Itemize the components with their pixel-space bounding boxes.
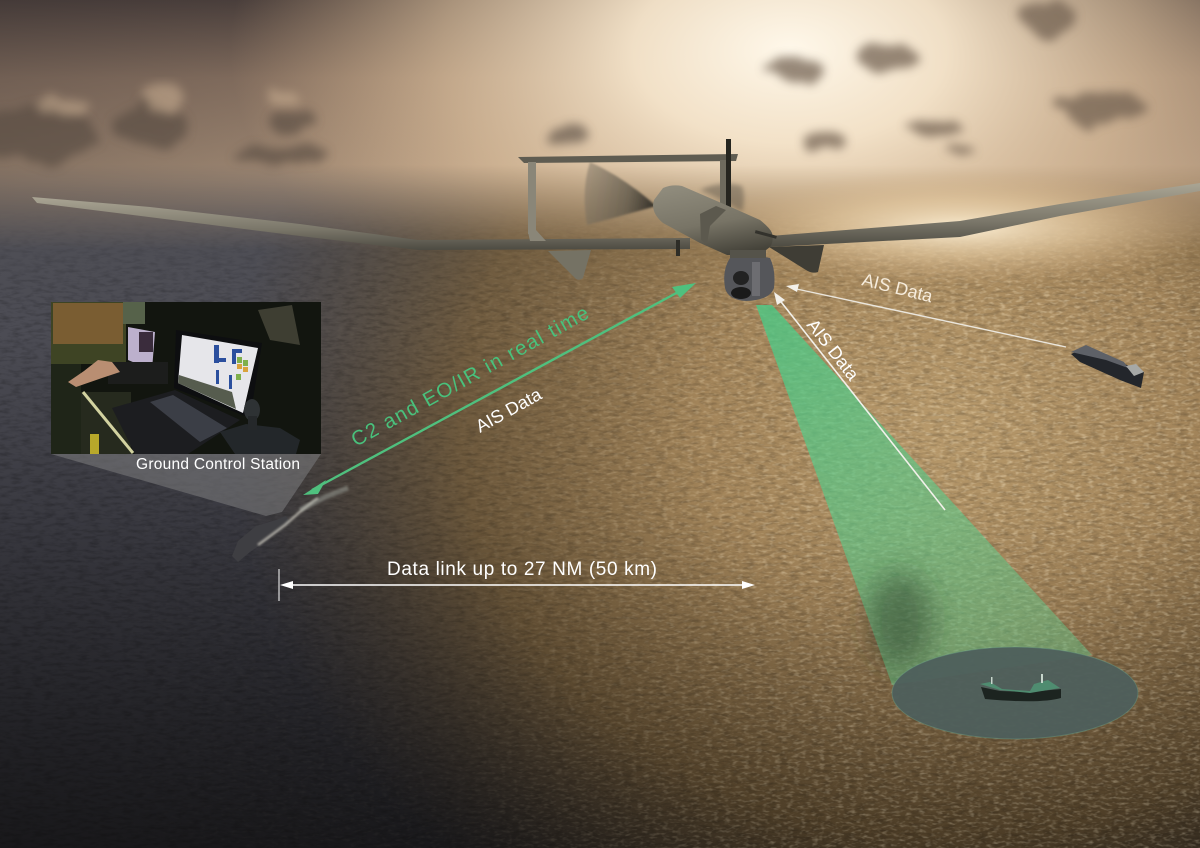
arrow: AIS data from target [774,292,945,510]
left winglet fin [548,250,591,280]
icon: target vessel [980,674,1061,701]
arrow: data link range [279,569,755,601]
keyboard [150,395,227,442]
laptop base [112,390,240,454]
joystick [220,424,300,454]
small monitor [128,327,155,370]
label: data link range: Data link up to 27 NM (50 km) [387,559,657,580]
icon: naval ship with ground control station [232,488,348,562]
panel: ground control station photo [51,302,321,454]
right winglet fin [769,245,824,273]
background: sunset sky [0,0,1200,260]
background: sky clouds [0,2,1149,164]
hand [68,360,120,387]
callout wedge from station to ship [51,454,321,516]
background: sun glint on horizon [0,165,1200,295]
laptop screen [178,335,258,413]
fuselage [653,185,773,255]
label: AIS data near merchant ship: AIS Data [860,269,936,307]
arrow: AIS data from merchant ship [786,284,1066,347]
EO/IR gimbal [724,256,774,301]
label: C2 and EO/IR in real time: C2 and EO/IR in real time [347,301,593,451]
icon: merchant ship upper right [1071,345,1144,388]
rail [83,392,133,453]
drone aircraft [32,139,1200,301]
propeller blur [585,162,656,225]
left wing [32,197,690,250]
label: AIS data on target arrow: AIS Data [803,315,864,385]
beam shadow patch [868,572,932,668]
boom and tail [518,154,738,163]
sensor beam to target vessel [756,305,1092,685]
right wing [770,183,1200,247]
arrow: C2 data link (green) [303,283,696,495]
wall panel [51,302,126,364]
target detection ellipse [892,647,1138,739]
label: AIS data on link: AIS Data [472,384,546,436]
label: ground control station: Ground Control Station [136,456,300,473]
laptop lid frame [174,330,262,418]
